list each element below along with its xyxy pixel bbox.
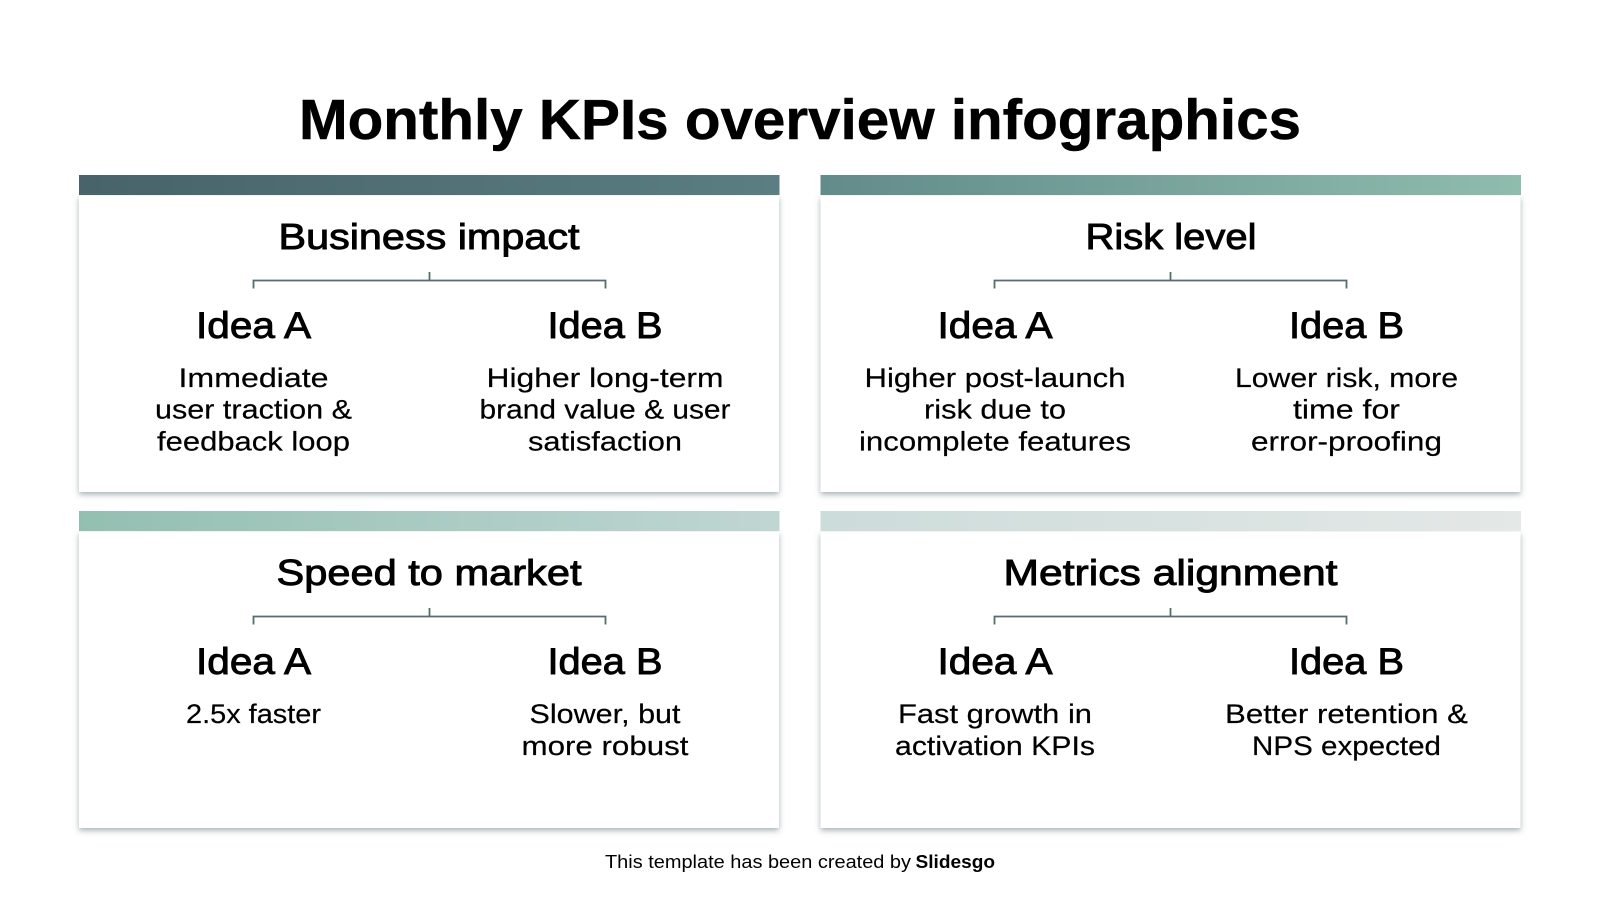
bracket connector: [994, 272, 1346, 288]
panel: speed to market: [79, 511, 780, 828]
panel: risk level: [820, 175, 1521, 492]
description: incomplete features: [859, 426, 1131, 456]
heading: Business impact: [278, 216, 580, 257]
column heading: Idea A: [938, 305, 1053, 346]
footer credit: This template has been created by: [605, 852, 911, 872]
description: [859, 363, 1131, 456]
description: [1225, 699, 1468, 761]
card background: [820, 196, 1520, 492]
bracket connector: [254, 608, 606, 624]
description: Slower, but: [530, 699, 681, 729]
card background: [79, 532, 779, 828]
description: more robust: [522, 731, 689, 761]
description: NPS expected: [1252, 731, 1441, 761]
column heading: Idea A: [938, 641, 1053, 682]
colour bar: [79, 511, 780, 531]
description: Fast growth in: [898, 699, 1092, 729]
card background: [79, 196, 779, 492]
description: risk due to: [924, 394, 1066, 424]
heading: Metrics alignment: [1004, 552, 1338, 593]
column heading: Idea B: [1289, 641, 1404, 682]
description: satisfaction: [528, 426, 682, 456]
column: Idea A: [895, 641, 1095, 761]
column heading: Idea B: [548, 641, 662, 682]
panel: metrics alignment: [820, 511, 1521, 828]
column heading: Idea A: [196, 641, 311, 682]
column: Idea A: [155, 305, 352, 456]
description: [522, 699, 689, 761]
description: Lower risk, more: [1235, 363, 1458, 393]
description: activation KPIs: [895, 731, 1095, 761]
card background: [820, 532, 1520, 828]
column: Idea A: [186, 641, 321, 729]
description: Higher long-term: [486, 363, 724, 393]
bracket connector: [994, 608, 1346, 624]
description: [895, 699, 1095, 761]
column: Idea B: [1225, 641, 1468, 761]
column: Idea B: [522, 641, 689, 761]
description: Better retention &: [1225, 699, 1468, 729]
description: time for: [1293, 394, 1400, 424]
bracket connector: [254, 272, 606, 288]
panel: business impact: [79, 175, 780, 492]
description: 2.5x faster: [186, 699, 321, 729]
description: error-proofing: [1251, 426, 1442, 456]
colour bar: [820, 511, 1521, 531]
column heading: Idea B: [548, 305, 662, 346]
footer credit: Slidesgo: [916, 852, 995, 872]
description: feedback loop: [157, 426, 350, 456]
colour bar: [79, 175, 780, 195]
column: Idea B: [1235, 305, 1458, 456]
description: [1235, 363, 1458, 456]
heading: Risk level: [1086, 216, 1256, 257]
column: Idea A: [859, 305, 1131, 456]
column heading: Idea B: [1289, 305, 1404, 346]
description: Immediate: [178, 363, 328, 393]
column heading: Idea A: [196, 305, 311, 346]
description: [155, 363, 352, 456]
description: brand value & user: [480, 394, 731, 424]
heading: Speed to market: [276, 552, 582, 593]
title: Monthly KPIs overview infographics: [299, 88, 1301, 152]
description: [480, 363, 731, 456]
description: user traction &: [155, 394, 352, 424]
colour bar: [820, 175, 1521, 195]
description: Higher post-launch: [864, 363, 1126, 393]
column: Idea B: [480, 305, 731, 456]
